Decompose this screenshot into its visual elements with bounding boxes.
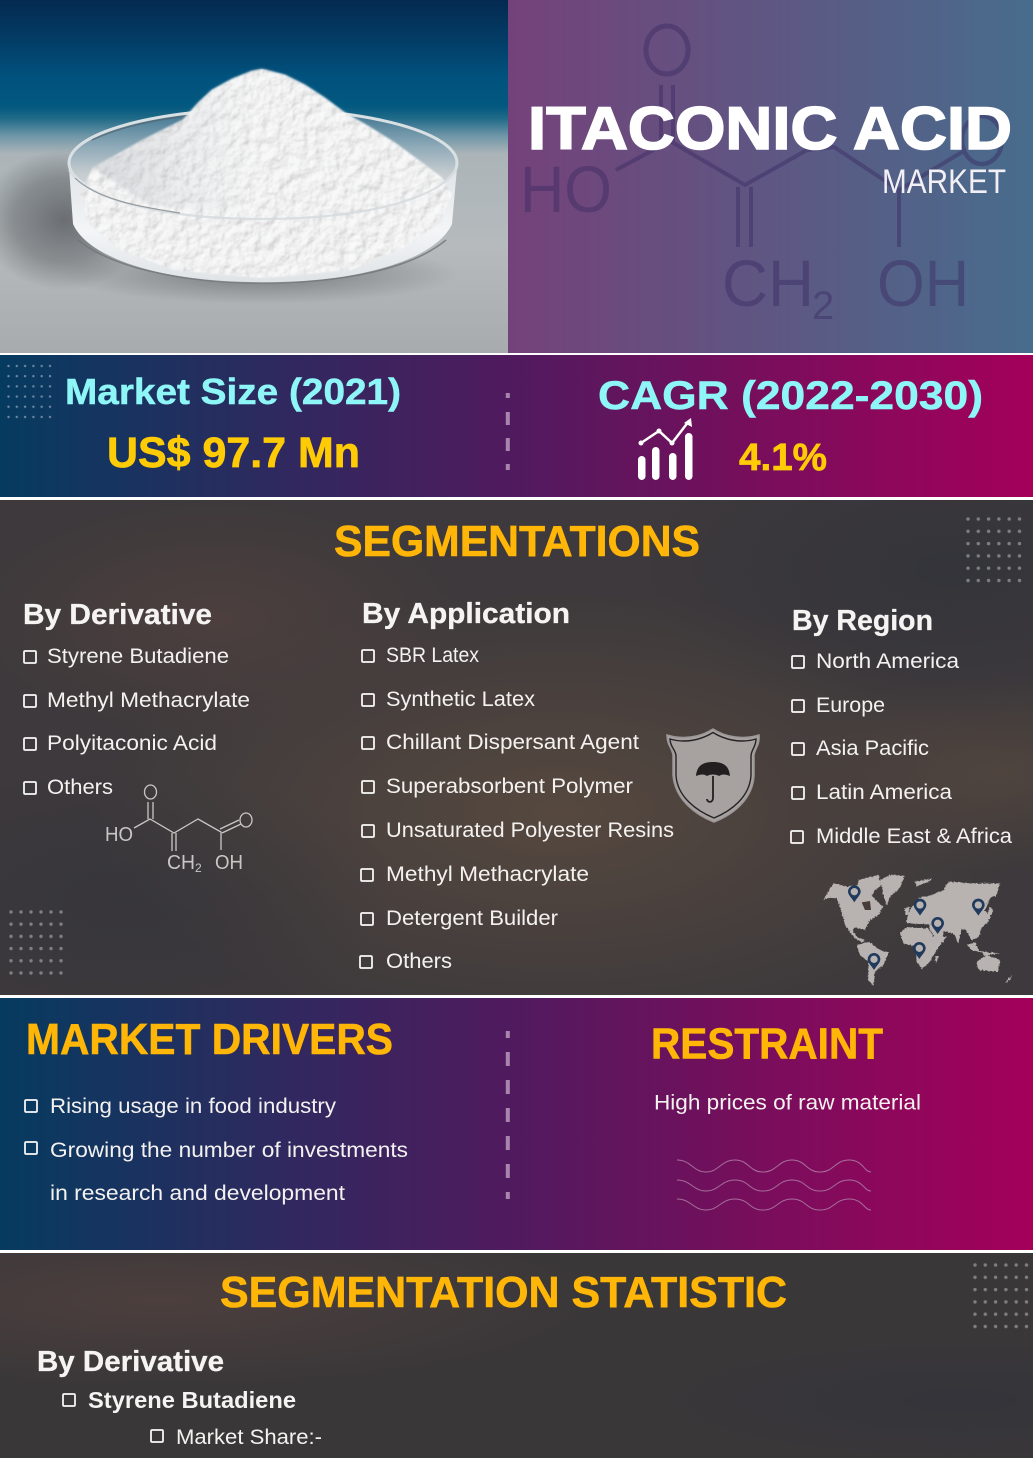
list: by region: Latin America xyxy=(816,781,952,804)
decoration: dots xyxy=(963,513,1025,587)
icon: growth bar chart xyxy=(638,418,692,480)
panel: title background xyxy=(508,0,1033,353)
icon: itaconic acid molecule: 2 xyxy=(195,861,202,875)
list: by region: Europe xyxy=(816,694,885,717)
panel: segmentation statistic xyxy=(0,1253,1033,1458)
texture: powder side shade xyxy=(93,69,262,215)
icon: world map with pins xyxy=(823,875,1012,986)
list: by region: By Region xyxy=(792,605,933,637)
text: restraint: High prices of raw material xyxy=(654,1092,921,1114)
list: by application: Chillant Dispersant Agent xyxy=(386,731,639,754)
list: by derivative: Others xyxy=(47,776,113,799)
list: by application xyxy=(360,598,674,973)
icon: powder pile xyxy=(80,69,452,278)
list: drivers: Growing the number of investments xyxy=(50,1139,408,1162)
list: drivers: in research and development xyxy=(50,1182,345,1205)
watermark: itaconic acid molecule: 2 xyxy=(812,284,834,328)
list: by region: North America xyxy=(816,650,959,673)
watermark: itaconic acid molecule: HO xyxy=(520,152,612,226)
bay xyxy=(862,901,871,910)
watermark: itaconic acid molecule xyxy=(520,26,1002,328)
icon: shield with umbrella xyxy=(667,729,759,822)
list: by application: Unsaturated Polyester Resins xyxy=(386,819,674,842)
list: by derivative xyxy=(23,599,250,799)
icon: glass dish back xyxy=(69,109,457,217)
decoration: dots xyxy=(970,1259,1032,1333)
list item: styrene butadiene: Styrene Butadiene xyxy=(88,1387,296,1413)
texture: powder grain xyxy=(80,69,452,278)
list: by region: Middle East & Africa xyxy=(816,825,1012,848)
heading: restraint: RESTRAINT xyxy=(651,1020,883,1068)
list: by region: Asia Pacific xyxy=(816,737,929,760)
icon: itaconic acid molecule xyxy=(105,785,252,875)
icon: itaconic acid molecule: HO xyxy=(105,824,133,846)
list: by application: By Application xyxy=(362,598,570,630)
list: by application: Synthetic Latex xyxy=(386,688,536,711)
panel: market size and CAGR band xyxy=(0,355,1033,497)
decoration: dots xyxy=(6,361,52,422)
panel: hero photo of itaconic acid powder in a glass dish xyxy=(0,0,508,353)
divider line xyxy=(0,1250,1033,1253)
divider line xyxy=(0,497,1033,500)
heading: CAGR: CAGR (2022-2030) xyxy=(598,374,983,418)
list: by application: Methyl Methacrylate xyxy=(386,863,589,886)
heading: segmentation statistic: SEGMENTATION STATISTIC xyxy=(220,1268,787,1317)
title: ITACONIC ACID xyxy=(528,95,1012,162)
panel: market drivers and restraint xyxy=(0,998,1033,1250)
list: by application: Superabsorbent Polymer xyxy=(386,775,633,798)
list: drivers: Rising usage in food industry xyxy=(50,1095,337,1118)
list item: market share: Market Share:- xyxy=(176,1426,322,1449)
value: market size: US$ 97.7 Mn xyxy=(107,429,360,477)
subtitle: MARKET xyxy=(882,163,1006,201)
divider line xyxy=(0,995,1033,998)
heading: market size: Market Size (2021) xyxy=(65,371,401,412)
list: by derivative: Methyl Methacrylate xyxy=(47,689,250,712)
list: by region xyxy=(791,605,1012,848)
subheading: by derivative: By Derivative xyxy=(37,1346,224,1378)
watermark: itaconic acid molecule: CH xyxy=(722,246,814,320)
decoration: dots xyxy=(6,906,66,979)
list: by application: Others xyxy=(386,950,452,973)
watermark: itaconic acid molecule: OH xyxy=(877,246,969,320)
decoration: waves xyxy=(677,1160,871,1210)
value: CAGR: 4.1% xyxy=(739,437,827,479)
icon: itaconic acid molecule: OH xyxy=(215,852,243,874)
divider: dashed xyxy=(506,393,510,470)
divider: dashed xyxy=(506,1031,510,1199)
divider line under hero xyxy=(0,353,1033,356)
list: by derivative: By Derivative xyxy=(23,599,212,631)
panel: segmentations xyxy=(0,500,1033,995)
list: by application: SBR Latex xyxy=(386,644,479,667)
list: by application: Detergent Builder xyxy=(386,907,558,930)
icon: glass dish wall xyxy=(69,168,457,283)
heading: market drivers: MARKET DRIVERS xyxy=(26,1015,393,1064)
list: by derivative: Polyitaconic Acid xyxy=(47,732,217,755)
list: drivers xyxy=(25,1095,408,1205)
heading: segmentations: SEGMENTATIONS xyxy=(334,517,700,566)
icon: dish front rim xyxy=(69,168,457,219)
icon: itaconic acid molecule: CH xyxy=(167,852,195,874)
list: by derivative: Styrene Butadiene xyxy=(47,645,229,668)
